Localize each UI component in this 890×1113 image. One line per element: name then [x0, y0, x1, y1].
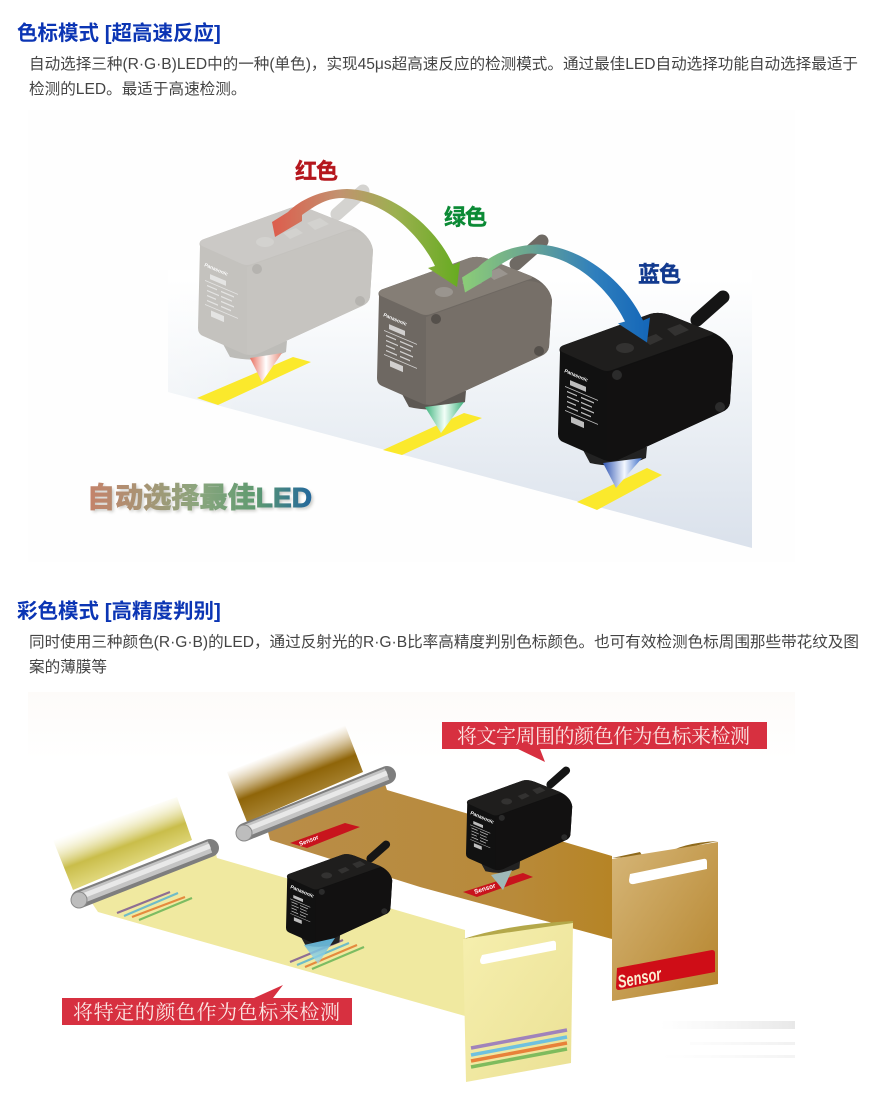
red mark under sensor [463, 873, 533, 897]
background streaks [660, 1021, 795, 1058]
light cone: green [425, 402, 464, 433]
sensor: semi-transparent green state: Panasonic [382, 312, 408, 328]
title: 色标模式: 色标模式 [超高速反应] [17, 21, 221, 45]
caption: 自动选择最佳LED: 自动选择最佳LED [87, 482, 312, 513]
red mark on brown film: Sensor [299, 835, 320, 848]
yellow film: back sheet [53, 797, 192, 890]
light cone: blue [603, 458, 642, 488]
text block: description of color mode: 案的薄膜等 [29, 658, 107, 676]
text block: description of color mode: 同时使用三种颜色(R·G·B)的LED，通过反射光的R·G·B比率高精度判别色标颜色。也可有效检测色标周围那些带花纹及图 [29, 633, 859, 651]
light cone [491, 870, 512, 890]
stripe: yellow mark 1 [197, 357, 311, 405]
tag: brown with red Sensor label: Sensor [616, 964, 664, 992]
arrow: blue to green [462, 244, 650, 342]
text block: description of color mark mode: 自动选择三种(R·G·B)LED中的一种(单色)，实现45μs超高速反应的检测模式。通过最佳LED自动选择功能自动选择最适于 [29, 54, 858, 73]
panel: film sensing illustration [28, 692, 795, 1095]
callout: top red label [442, 722, 767, 762]
color stripes on yellow film [117, 892, 364, 969]
roller: brown [236, 773, 387, 841]
callout: bottom red label: 将特定的颜色作为色标来检测 [73, 1001, 340, 1024]
brown film: back sheet [227, 725, 363, 822]
background wall and floor [168, 270, 752, 548]
sensor: over yellow film [286, 845, 392, 964]
label: 红色: 红色 [295, 159, 338, 184]
text block: description of color mark mode: 检测的LED。最适于高速检测。 [29, 80, 246, 98]
tag: brown with red Sensor label [612, 841, 718, 1001]
label: 绿色: 绿色 [444, 205, 487, 230]
panel: LED auto-selection illustration [28, 110, 795, 562]
sensor: black active blue state: Panasonic [563, 368, 589, 384]
text block: description of color mark mode [29, 54, 858, 98]
stripe: yellow mark 3 [577, 468, 662, 510]
sensor: faded red state [198, 191, 373, 382]
red mark under sensor: Sensor [473, 882, 497, 896]
sensor: over brown film [466, 771, 572, 890]
stripe: yellow mark 2 [383, 413, 482, 455]
callout: bottom red label [62, 985, 352, 1025]
yellow film: belt [90, 850, 465, 1016]
tag: yellow with color stripes [463, 921, 573, 1082]
sensor: black active blue state [558, 297, 733, 488]
roller: yellow [71, 846, 210, 908]
callout: top red label: 将文字周围的颜色作为色标来检测 [457, 725, 750, 748]
light cone [304, 938, 335, 964]
caption: 自动选择最佳LED: 自动选择最佳LED [89, 484, 314, 515]
sensor: over yellow film: Panasonic [289, 884, 315, 900]
red mark on brown film [290, 823, 360, 848]
brown film: belt [268, 784, 612, 939]
label: 蓝色: 蓝色 [638, 262, 681, 287]
arrow: green to red [272, 189, 460, 287]
sensor: over brown film: Panasonic [469, 810, 495, 826]
text block: description of color mode [29, 633, 859, 676]
light cone: red [250, 353, 282, 382]
sensor: semi-transparent green state [377, 241, 552, 433]
title: 彩色模式: 彩色模式 [高精度判别] [17, 599, 221, 623]
sensor: faded red state: Panasonic [203, 262, 229, 278]
